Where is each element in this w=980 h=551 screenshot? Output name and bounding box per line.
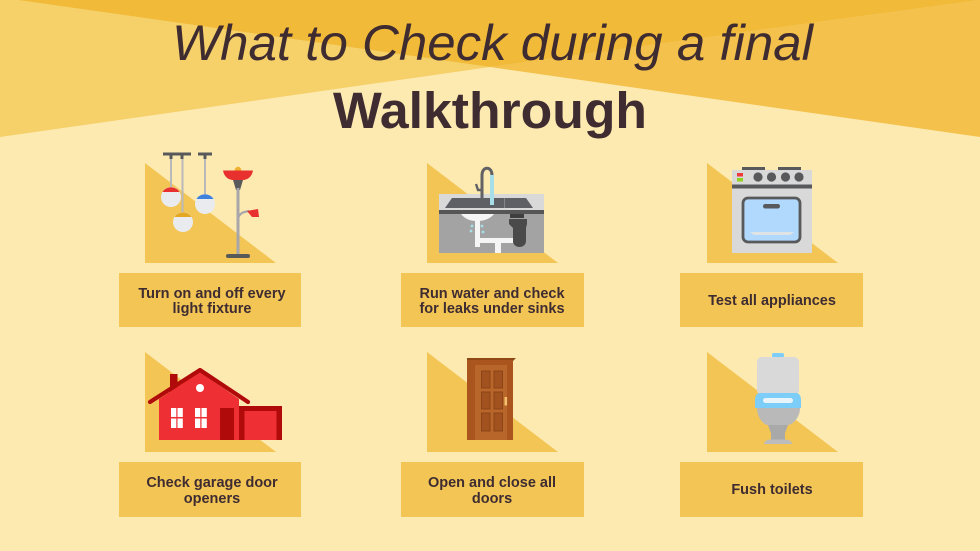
icon background triangle — [145, 352, 276, 452]
icon background triangle — [707, 163, 838, 263]
header banner — [0, 0, 980, 137]
label text: Run water and check — [419, 286, 565, 302]
label box — [680, 273, 863, 327]
panel: garage — [119, 352, 301, 517]
icon background triangle — [427, 352, 558, 452]
label box — [401, 273, 584, 327]
label text: Check garage door — [146, 475, 278, 491]
label text: Open and close all — [428, 475, 556, 491]
title — [172, 15, 815, 139]
label text: for leaks under sinks — [419, 301, 565, 317]
panel: appliances — [680, 163, 863, 327]
label box — [119, 273, 301, 327]
label text: doors — [472, 491, 512, 507]
panel: light fixtures — [119, 152, 301, 327]
title: What to Check during a final — [172, 15, 815, 71]
panel: toilets — [680, 352, 863, 517]
panel: doors — [401, 352, 584, 517]
icon: sink — [439, 168, 544, 253]
label text: Fush toilets — [731, 482, 813, 498]
title: Walkthrough — [333, 82, 647, 139]
panel: sinks — [401, 163, 584, 327]
icon: lights — [161, 152, 259, 258]
icon: toilet — [755, 353, 801, 444]
label box — [680, 462, 863, 517]
icon background triangle — [145, 163, 276, 263]
icon: oven — [732, 167, 812, 253]
icon: door — [467, 358, 516, 440]
label text: Test all appliances — [708, 293, 836, 309]
icon background triangle — [427, 163, 558, 263]
label text: openers — [184, 491, 240, 507]
label text: Turn on and off every — [138, 286, 286, 302]
label box — [401, 462, 584, 517]
icon: house — [150, 370, 282, 440]
label box — [119, 462, 301, 517]
icon background triangle — [707, 352, 838, 452]
label text: light fixture — [173, 301, 251, 317]
